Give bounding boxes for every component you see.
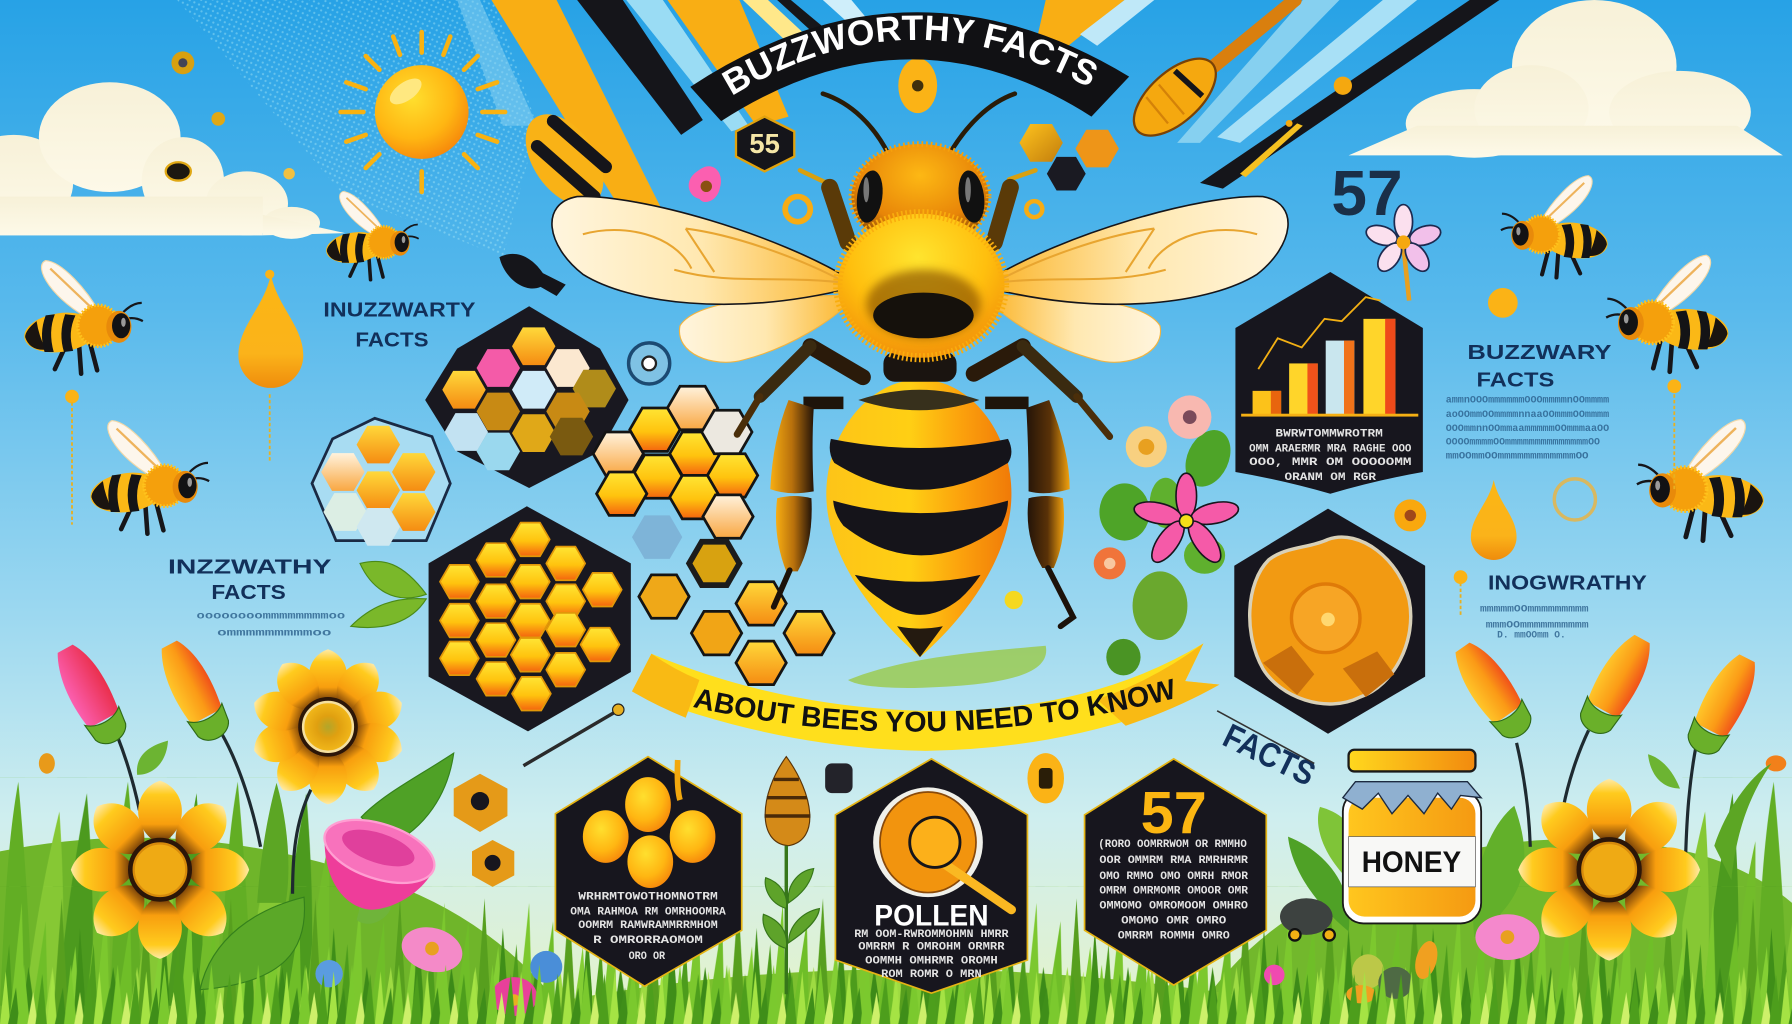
subtitle ribbon: ABOUT BEES YOU NEED TO KNOW <box>693 678 1173 732</box>
panel text <box>854 929 1009 981</box>
tall grass right <box>1682 777 1792 1024</box>
tulip orange right 3 <box>1681 649 1765 761</box>
big leaf behind pink bloom <box>361 753 454 846</box>
bar chart hexagon <box>1235 272 1423 494</box>
bee front legs <box>737 170 1110 437</box>
pink tulip bloom <box>317 808 442 924</box>
free honeycomb cluster <box>593 386 834 685</box>
honey hexagon <box>1234 509 1425 734</box>
striped bee motif <box>510 100 619 220</box>
panel text: ROM ROMR O MRN <box>881 969 982 981</box>
chart caption <box>1249 429 1412 484</box>
grass blades back <box>0 887 1792 1024</box>
bee thorax <box>838 214 1005 358</box>
cloud left <box>0 82 345 239</box>
text block: top-right 57: 57 <box>1331 157 1403 229</box>
tulip stems <box>118 730 1696 894</box>
panel text: OMRRM ROMMH OMRO <box>1118 930 1230 942</box>
panel text <box>1098 839 1249 942</box>
text block: right lower label: mmmOOmmmmmmmmmm <box>1486 619 1589 630</box>
badge: 55 <box>736 117 794 171</box>
badge: 55: 55 <box>749 128 780 159</box>
striped hive and small icons <box>454 704 1064 887</box>
bowl and spoon <box>873 787 1011 910</box>
bars <box>1241 319 1418 417</box>
grass blades front <box>0 960 1792 1024</box>
text block: right lower label <box>1480 572 1647 641</box>
panel text: OMMOMO OMROMOOM OMHRO <box>1099 901 1249 913</box>
bottom hexagon: pollen <box>835 759 1027 993</box>
bee abdomen <box>826 379 1011 657</box>
panel text: OMRM OMRMOMR OMOOR OMR <box>1099 886 1248 898</box>
jar label: HONEY <box>1362 846 1461 879</box>
pollen label: POLLEN <box>874 900 989 933</box>
honey dipper top right <box>1121 0 1295 149</box>
icon: small flower <box>1364 205 1443 301</box>
panel text: OMA RAHMOA RM OMRHOOMRA <box>570 906 726 918</box>
title banner: BUZZWORTHY FACTS <box>722 16 1097 95</box>
cloud right <box>1349 0 1783 158</box>
text block: left upper label <box>323 299 476 351</box>
icon: honey drop left <box>238 274 303 388</box>
text block: right lower label: INOGWRATHY <box>1488 572 1647 595</box>
meadow blossoms <box>315 914 1539 1016</box>
panel text: RM OOM-RWROMMOHMN HMRR <box>854 929 1009 941</box>
tulip orange left <box>151 635 236 747</box>
small plant under the hive <box>763 846 819 994</box>
panel text: OOMRM RAMWRAMMRRMHOM <box>578 920 718 932</box>
honey balls <box>583 777 715 888</box>
bottom hexagon: honey drops <box>555 757 742 986</box>
panel text: OMO RMMO OMO OMRH RMOR <box>1099 871 1248 883</box>
tall grass left <box>0 777 329 1024</box>
dark hexagon: coloured cells <box>425 306 629 488</box>
text block: left lower label: ommmmmmmmmoo <box>217 627 332 638</box>
icon: honey drop right <box>1471 480 1517 560</box>
panel text: WRHRMTOWOTHOMNOTRM <box>578 891 718 903</box>
text block: left lower label: FACTS <box>211 581 286 604</box>
bee right lower <box>1637 419 1767 541</box>
panel text: (RORO OOMRRWOM OR RMMHO <box>1098 839 1247 851</box>
trend line <box>1258 297 1381 369</box>
big leaf lower <box>200 897 305 990</box>
chart caption: OMM ARAERMR MRA RAGHE OOO <box>1249 443 1412 455</box>
chart caption: ORANM OM RGR <box>1285 472 1377 484</box>
panel text <box>570 891 726 963</box>
bee left lower <box>88 421 209 534</box>
leaves behind the jar <box>1288 806 1524 937</box>
icon: sun <box>341 32 505 192</box>
text block: left lower label: oooooooommmmmmmmoo <box>197 610 345 621</box>
text block: right upper label: mmOOmmOOmmmmmmmmmmmmOO <box>1446 450 1589 461</box>
bee right top <box>1501 176 1610 277</box>
small hexagons near the antenna <box>499 58 1119 384</box>
bee right middle <box>1606 255 1731 372</box>
sunflower right <box>1518 779 1700 961</box>
panel text: OMOMO OMR OMRO <box>1121 915 1227 927</box>
text block: right upper label: ammnOOOmmmmmmOOOmmmmnOOmmmm <box>1446 394 1609 405</box>
text block: right upper label: BUZZWARY <box>1467 341 1612 364</box>
green meadow hills <box>0 838 1792 1024</box>
dark hexagon: golden honeycomb <box>429 506 631 731</box>
bee left top <box>324 191 419 280</box>
panel text: ORO OR <box>629 951 666 963</box>
sunflower upper left <box>248 649 408 804</box>
tulip pink <box>47 639 133 751</box>
floating dots upper left <box>166 51 295 181</box>
tulip orange right 1 <box>1446 636 1539 745</box>
panel text: OMRRM R OMROHM ORMRR <box>858 942 1005 954</box>
panel text: R OMRORRAOMOM <box>593 935 703 947</box>
chart caption: BWRWTOMMWROTRM <box>1275 429 1383 441</box>
text block: left upper label: INUZZWARTY <box>323 299 476 322</box>
text block: right upper label: OOOmmnnOOmmaammmmmOOmmmaaOO <box>1446 423 1609 434</box>
number 57: 57 <box>1141 779 1207 846</box>
sunburst rays at the top <box>457 0 1499 269</box>
small leaves and buds <box>39 741 1786 903</box>
text block: left upper label: FACTS <box>355 328 429 351</box>
sunflower lower left <box>71 781 249 959</box>
text block: right upper label: FACTS <box>1477 368 1554 391</box>
tulip orange right 2 <box>1573 629 1659 740</box>
text block: right upper label <box>1446 341 1612 461</box>
panel text: OOR OMMRM RMA RMRHRMR <box>1099 855 1249 867</box>
text block: left lower label <box>168 556 345 638</box>
text block: left lower label: INZZWATHY <box>168 556 332 579</box>
bee head <box>851 144 989 249</box>
wing right <box>989 196 1288 362</box>
text block: right upper label: OOOOmmmmOOmmmmmmmmmmmmmmOO <box>1446 437 1600 448</box>
chart caption: OOO, MMR OM OOOOOMM <box>1249 457 1411 469</box>
panel text: OOMMH OMHRMR OROMH <box>865 955 998 967</box>
text block: facts tilted label: FACTS <box>1217 717 1321 794</box>
wing left <box>552 196 851 362</box>
bottom hexagon: 57 facts <box>1085 759 1266 985</box>
bee neck <box>883 352 957 382</box>
small honey accents <box>65 270 1681 617</box>
flowers and leaves beside the bee <box>848 395 1240 688</box>
honey jar <box>1343 750 1481 923</box>
text block: right lower label: mmmmmOOmmmmmmmmm <box>1480 603 1589 614</box>
outline hexagon: pale cells <box>312 418 450 546</box>
bee middle legs <box>770 397 1073 626</box>
text block: right upper label: aoOOmmOOmmmmnnaaOOmmmOOmmmm <box>1446 409 1609 420</box>
subtitle ribbon <box>632 643 1220 751</box>
grey bug under the jar <box>1280 898 1335 941</box>
leaves beside the honeycomb panel <box>351 561 426 628</box>
text block: right lower label: D. mmOOmm O. <box>1497 630 1566 641</box>
bee antennae <box>823 94 1015 155</box>
bee left middle <box>22 261 143 374</box>
halftone sky band <box>177 0 537 257</box>
